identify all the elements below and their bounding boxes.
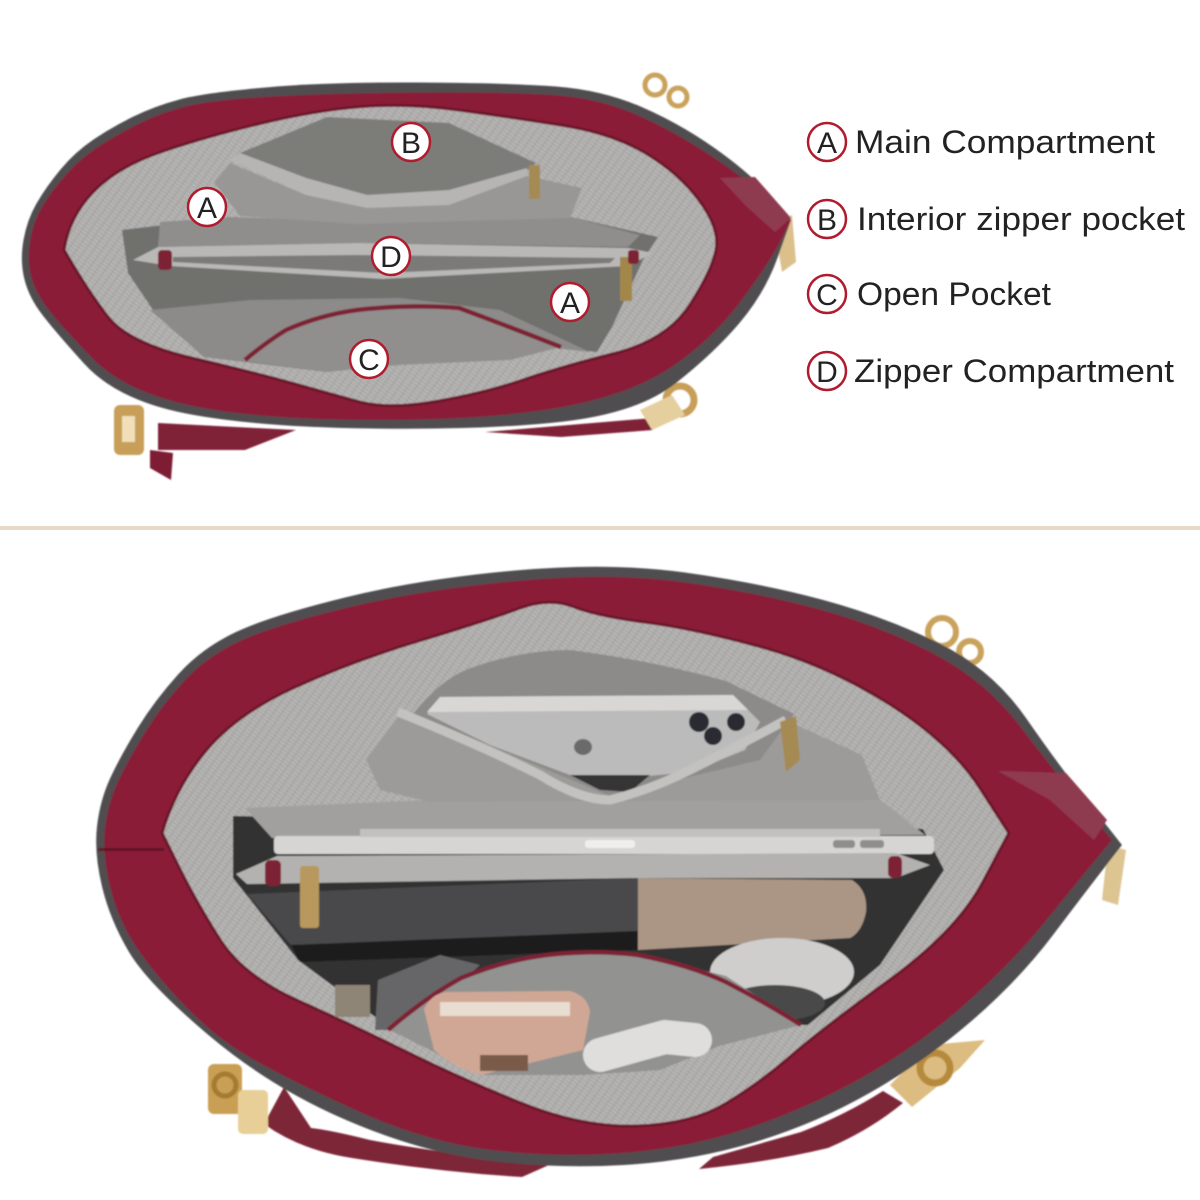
red trim bbox=[104, 577, 1112, 1155]
lining bbox=[64, 105, 717, 406]
rear pocket bbox=[413, 650, 794, 796]
legend item: main compartment: A bbox=[817, 127, 837, 160]
black band bbox=[291, 931, 638, 962]
legend item: zipper compartment: D bbox=[816, 356, 838, 389]
interior dark bbox=[122, 217, 658, 372]
white earbuds case bbox=[600, 1037, 695, 1055]
legend item: zipper compartment: Zipper Compartment bbox=[854, 353, 1174, 389]
flap bbox=[998, 771, 1107, 840]
silver round item bbox=[710, 938, 854, 1021]
zipper pocket B bbox=[214, 117, 582, 224]
photo: bottom handbag with contents bbox=[96, 567, 1126, 1177]
open pocket bbox=[388, 952, 801, 1075]
marker: A second bbox=[551, 283, 589, 321]
marker: B bbox=[392, 123, 430, 161]
lining bbox=[162, 602, 1009, 1126]
marker: C: C bbox=[358, 344, 380, 377]
legend item: main compartment: Main Compartment bbox=[855, 124, 1155, 160]
zipper compartment D bbox=[133, 243, 653, 301]
pink pouch bbox=[424, 991, 590, 1075]
legend item: interior zipper pocket: Interior zipper pocket bbox=[857, 201, 1185, 237]
lower lining fold bbox=[150, 298, 590, 372]
pocket C bbox=[245, 306, 561, 372]
zipper compartment edge bbox=[236, 853, 930, 884]
tan patch bbox=[335, 985, 370, 1017]
legend bbox=[808, 123, 1185, 390]
divider bbox=[0, 526, 1200, 530]
handles and hardware bbox=[114, 75, 796, 480]
zipper pull bbox=[300, 866, 319, 928]
rear wall band bbox=[158, 217, 640, 247]
beige pouch bbox=[638, 878, 866, 950]
outer shell bbox=[96, 567, 1122, 1166]
phone bbox=[427, 695, 760, 792]
legend item: interior zipper pocket: B bbox=[817, 204, 837, 237]
marker: A second: A bbox=[560, 287, 580, 320]
interior dark bbox=[233, 816, 944, 1025]
legend item: open pocket: C bbox=[816, 279, 838, 312]
marker: A bbox=[188, 188, 226, 226]
marker: D: D bbox=[380, 241, 402, 274]
handles and hardware bbox=[208, 618, 1126, 1177]
dark notebook bbox=[247, 878, 638, 945]
marker: C bbox=[350, 340, 388, 378]
seam bbox=[98, 848, 164, 851]
tablet bbox=[274, 829, 934, 854]
zipper pocket front edge bbox=[398, 712, 786, 800]
legend item: open pocket: Open Pocket bbox=[857, 276, 1051, 312]
outer shell bbox=[22, 82, 791, 429]
flap bbox=[720, 177, 791, 232]
photo: top handbag bbox=[22, 75, 796, 480]
rear wall above laptop bbox=[245, 800, 925, 838]
folded umbrella bbox=[375, 955, 480, 1030]
marker: A: A bbox=[197, 192, 217, 225]
red trim bbox=[29, 92, 791, 420]
rear pocket lower fabric bbox=[366, 714, 880, 802]
marker: D bbox=[372, 237, 410, 275]
marker: B: B bbox=[401, 127, 421, 160]
